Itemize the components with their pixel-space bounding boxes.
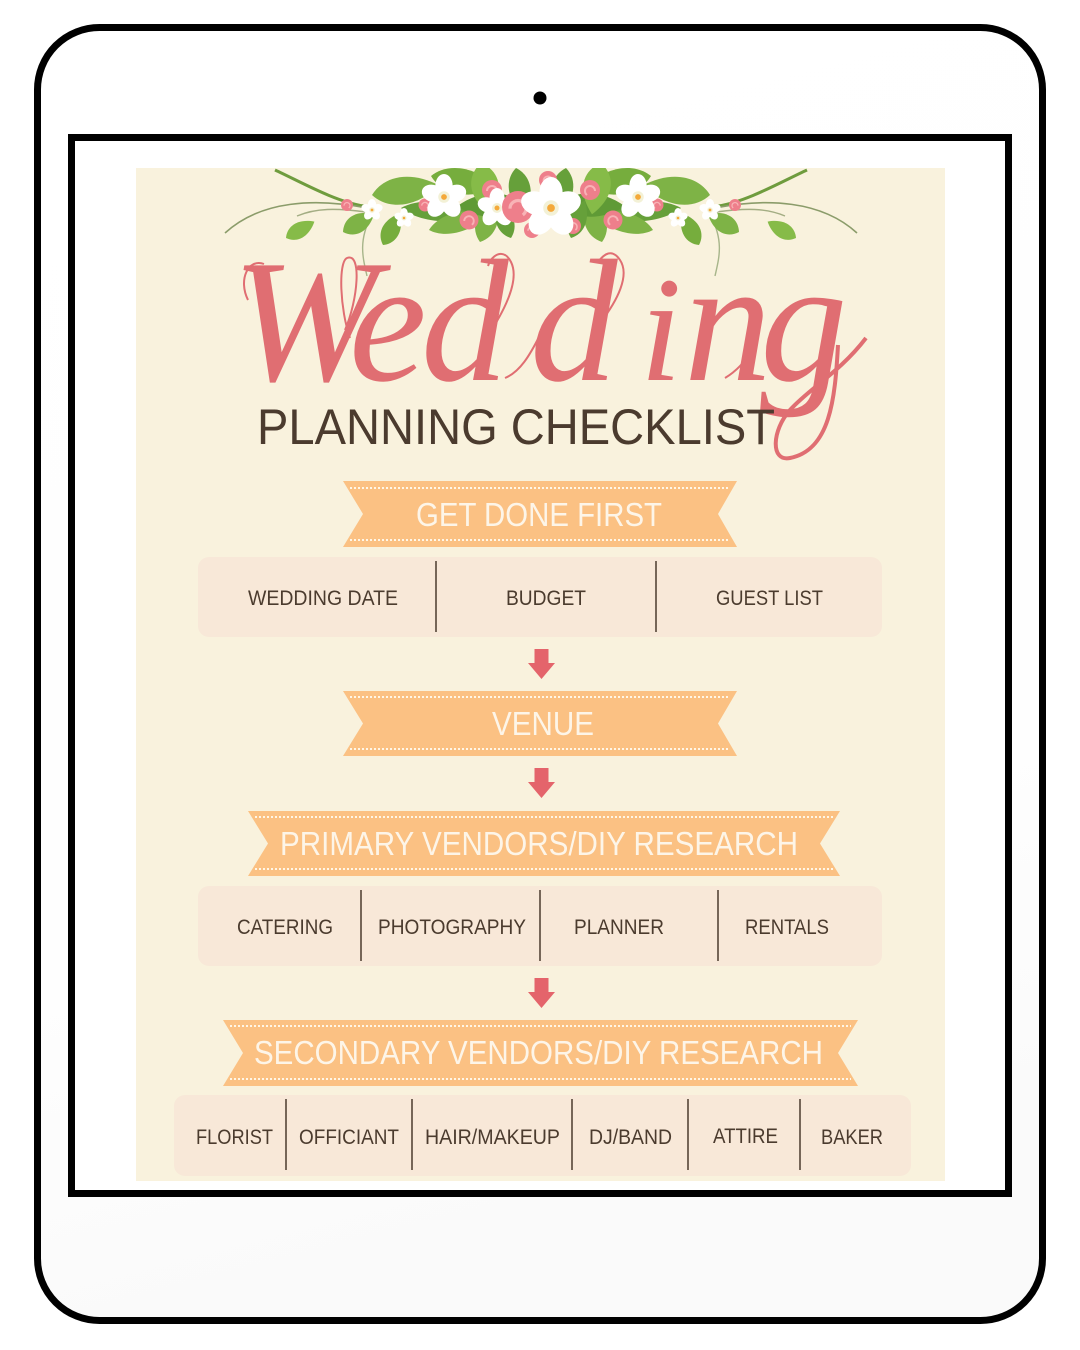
panel: first items: BUDGET xyxy=(506,587,586,610)
ribbon: secondary vendors: SECONDARY VENDORS/DIY RESEARCH xyxy=(254,1034,823,1071)
panel: secondary items xyxy=(174,1095,911,1176)
ribbon: venue: VENUE xyxy=(492,705,594,742)
panel: secondary items: FLORIST xyxy=(196,1126,273,1149)
arrow xyxy=(528,649,555,679)
title: Wedding xyxy=(232,224,866,458)
floral garland xyxy=(225,161,857,276)
ribbon: get done first: GET DONE FIRST xyxy=(416,496,662,533)
panel: primary items: PLANNER xyxy=(574,916,664,939)
panel: primary items: CATERING xyxy=(237,916,333,939)
panel: first items: WEDDING DATE xyxy=(248,587,398,610)
title: Wedding: n xyxy=(684,224,772,418)
ribbon: primary vendors xyxy=(248,811,840,876)
title: Wedding: d xyxy=(421,224,509,418)
panel: primary items: PHOTOGRAPHY xyxy=(378,916,526,939)
panel: secondary items: HAIR/MAKEUP xyxy=(425,1126,560,1149)
flourish: g tail xyxy=(776,338,866,458)
panel: primary items xyxy=(198,886,882,966)
title: Wedding: d xyxy=(530,224,618,418)
icon: camera dot xyxy=(534,92,546,104)
title: Wedding: e xyxy=(349,224,427,418)
panel: secondary items: ATTIRE xyxy=(713,1125,778,1148)
panel: primary items: RENTALS xyxy=(745,916,829,939)
ribbon: secondary vendors xyxy=(223,1020,858,1086)
subtitle: PLANNING CHECKLIST xyxy=(257,399,775,455)
panel: checklist page xyxy=(136,168,945,1181)
arrow xyxy=(528,978,555,1008)
ribbon: primary vendors: PRIMARY VENDORS/DIY RESEARCH xyxy=(280,825,798,862)
panel: first items: GUEST LIST xyxy=(716,587,823,610)
tablet screen xyxy=(72,138,1008,1194)
panel: secondary items: DJ/BAND xyxy=(589,1126,672,1149)
title: Wedding: i xyxy=(640,247,682,413)
flourishes xyxy=(244,253,752,378)
title: Wedding: g xyxy=(760,224,848,418)
ribbon: venue xyxy=(343,691,737,756)
arrow xyxy=(528,768,555,798)
ribbon: get done first xyxy=(343,481,737,547)
title: Wedding: W xyxy=(232,224,392,418)
panel: secondary items: BAKER xyxy=(821,1126,883,1149)
panel: secondary items: OFFICIANT xyxy=(299,1126,399,1149)
panel: first items xyxy=(198,557,882,637)
